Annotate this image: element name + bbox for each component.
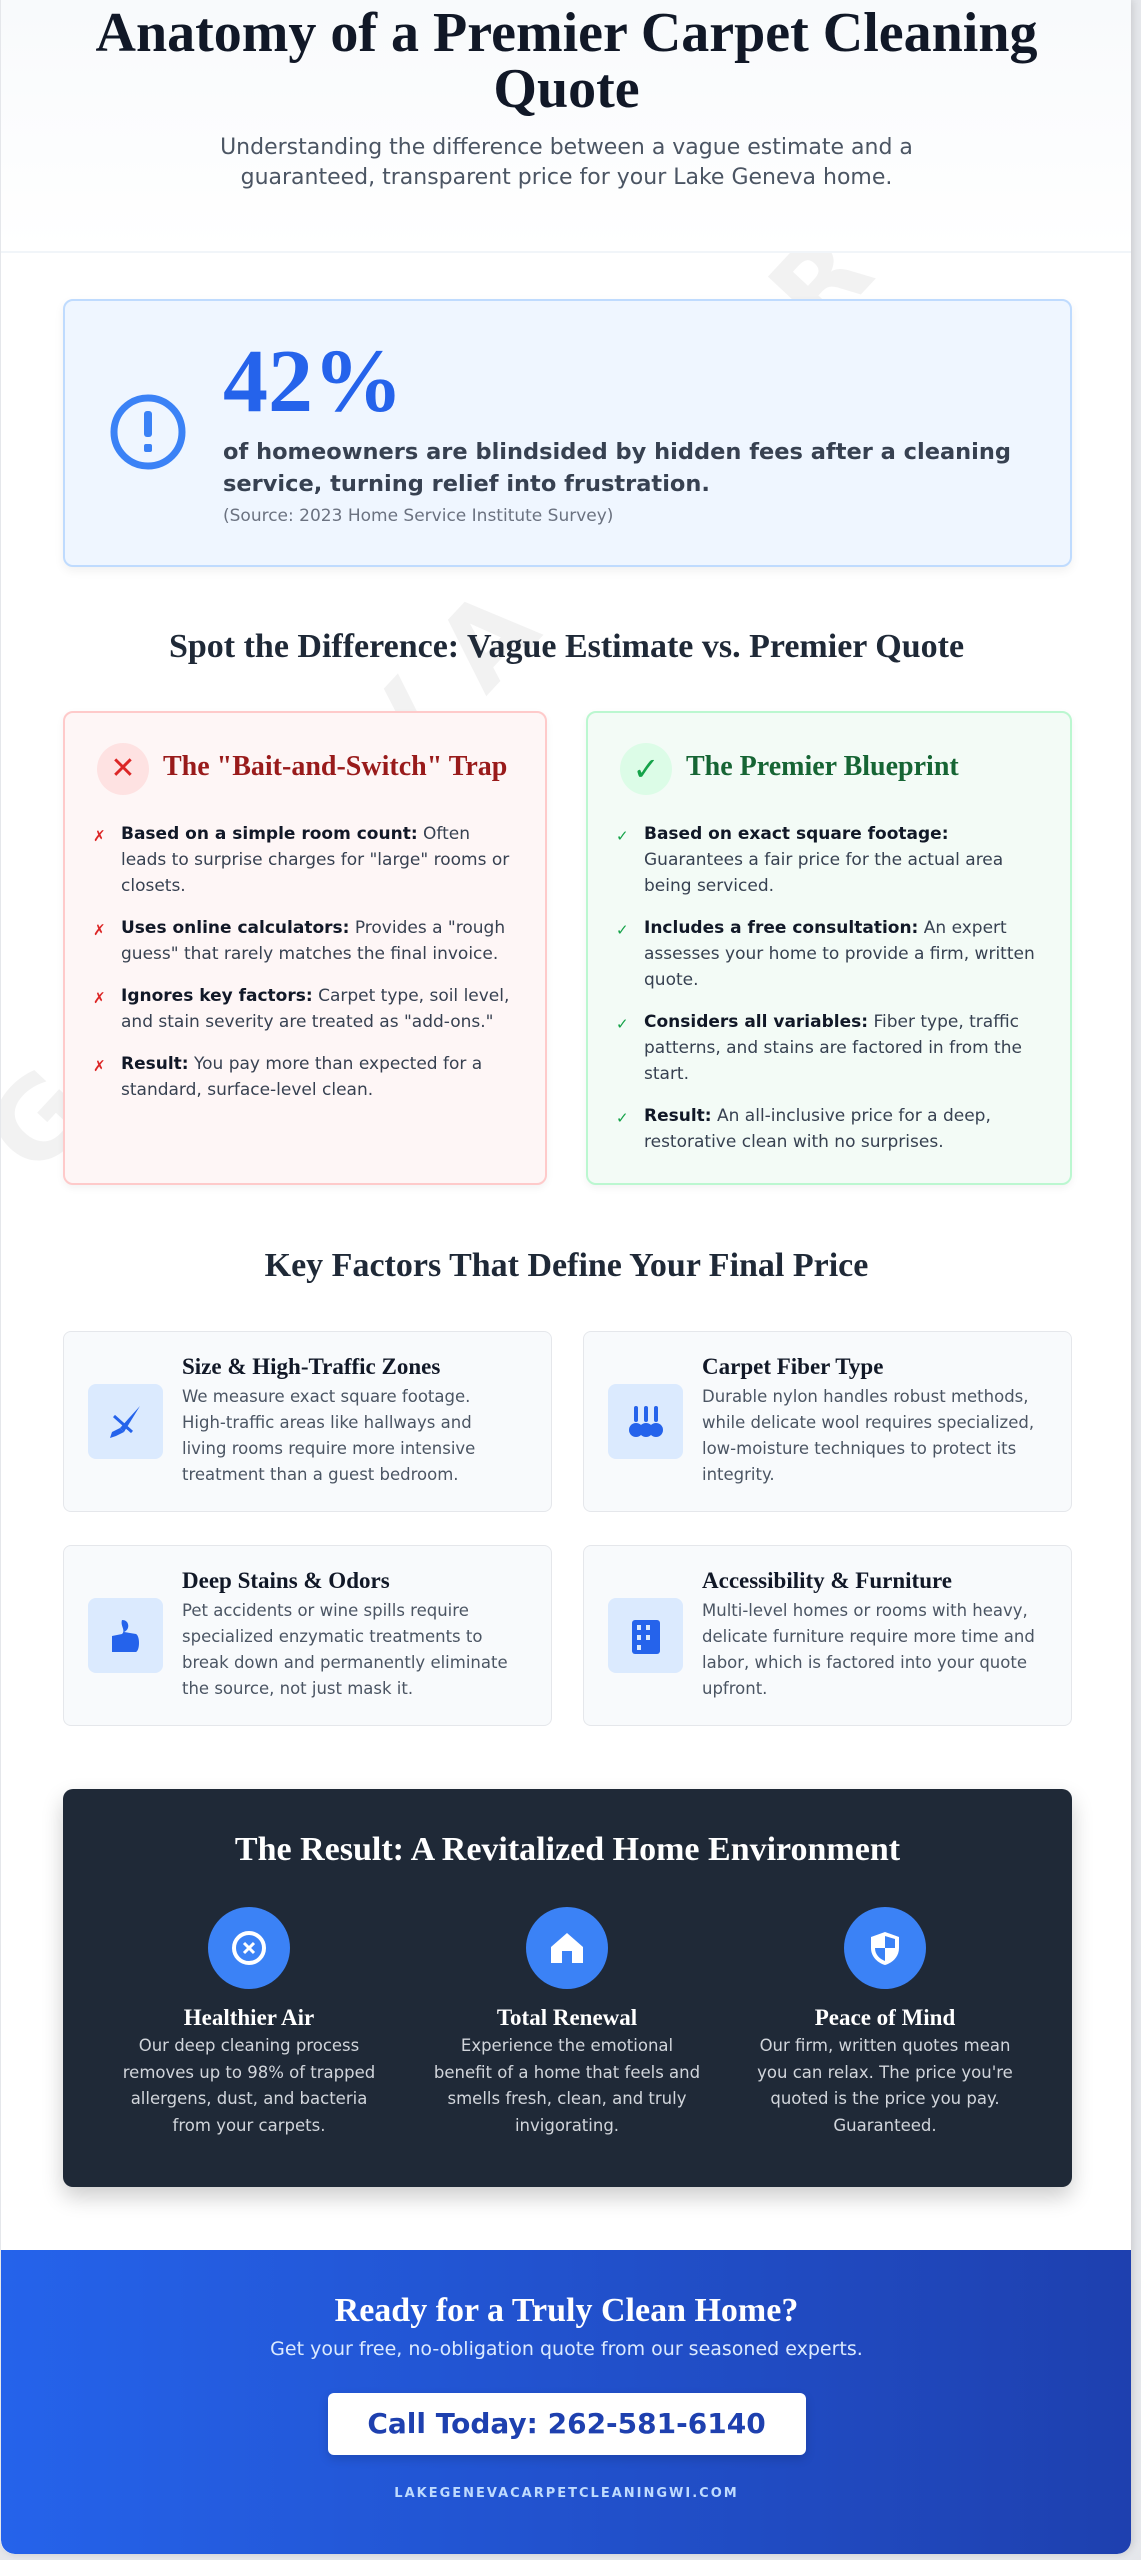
stat text: (Source: 2023 Home Service Institute Survey) [223, 506, 613, 526]
factor: fiber [583, 1331, 1072, 1512]
benefit: healthier air: Healthier Air [184, 2005, 314, 2030]
factor: size: We measure exact square footage. High-traffic areas like hallways and living rooms require more intensive treatment than a guest bedroom. [182, 1387, 475, 1484]
icon: brush [88, 1384, 163, 1459]
stat text [223, 439, 1011, 526]
icon: fibers [608, 1384, 683, 1459]
icon: exclamation [110, 394, 186, 470]
list: ✓ [616, 921, 629, 939]
list [616, 824, 1035, 1152]
list: Uses online calculators: Provides a "rough guess" that rarely matches the final invoice. [121, 918, 505, 964]
subtitle: Understanding the difference between a vague estimate and a guaranteed, transparent price for your Lake Geneva home. [220, 135, 913, 190]
factor: stains [63, 1545, 552, 1726]
list [93, 824, 510, 1100]
benefit: total renewal [434, 1907, 700, 2134]
list: Based on exact square footage: Guarantees a fair price for the actual area being serviced. [644, 824, 1003, 896]
benefit: peace of mind: Our firm, written quotes mean you can relax. The price you're quoted is the price you pay. Guaranteed. [757, 2036, 1013, 2134]
stat box [63, 299, 1072, 567]
icon: building [608, 1598, 683, 1673]
call button: Call Today: 262-581-6140 [367, 2407, 766, 2440]
header [1, 0, 1132, 253]
icon: x [97, 743, 149, 795]
heading: The Premier Blueprint [686, 751, 959, 782]
list: ✗ [93, 827, 106, 845]
cta subtitle: Get your free, no-obligation quote from our seasoned experts. [270, 2338, 863, 2360]
list: ✓ [616, 1109, 629, 1127]
factor: stains: Pet accidents or wine spills require specialized enzymatic treatments to break down and permanently eliminate the source, not just mask it. [182, 1601, 508, 1698]
factor: fiber: Carpet Fiber Type [702, 1354, 883, 1379]
list: ✓ [616, 1015, 629, 1033]
list: Considers all variables: Fiber type, traffic patterns, and stains are factored in from the start. [644, 1012, 1022, 1084]
title: Anatomy of a Premier Carpet Cleaning Quote [96, 2, 1038, 120]
list: Based on a simple room count: Often leads to surprise charges for "large" rooms or closets. [121, 824, 509, 896]
icon: stain [88, 1598, 163, 1673]
factor: fiber: Durable nylon handles robust methods, while delicate wool requires specialized, low-moisture techniques to protect its integrity. [702, 1387, 1034, 1484]
factor: accessibility [583, 1545, 1072, 1726]
benefit: healthier air: Our deep cleaning process removes up to 98% of trapped allergens, dust, and bacteria from your carpets. [123, 2036, 375, 2134]
list: Ignores key factors: Carpet type, soil level, and stain severity are treated as "add-ons." [121, 986, 509, 1032]
benefit: total renewal: Total Renewal [497, 2005, 637, 2030]
list: Result: An all-inclusive price for a deep, restorative clean with no surprises. [644, 1106, 991, 1152]
list: ✗ [93, 1057, 106, 1075]
list: ✗ [93, 989, 106, 1007]
icon: check [620, 743, 672, 795]
call button [328, 2393, 806, 2455]
icon: check: ✓ [633, 750, 659, 788]
panel: premier blueprint [586, 711, 1072, 1185]
factor: size [63, 1331, 552, 1512]
stat number: 42% [223, 332, 403, 431]
factor: size: Size & High-Traffic Zones [182, 1354, 440, 1379]
factor: accessibility: Multi-level homes or rooms with heavy, delicate furniture require more time and labor, which is factored into your quote upfront. [702, 1601, 1035, 1698]
benefit: total renewal: Experience the emotional benefit of a home that feels and smells fresh, clean, and truly invigorating. [434, 2036, 700, 2134]
benefit: healthier air [123, 1907, 375, 2134]
stat text: of homeowners are blindsided by hidden fees after a cleaning service, turning relief into frustration. [223, 439, 1011, 497]
heading: key factors: Key Factors That Define Your Final Price [265, 1247, 868, 1284]
list: Includes a free consultation: An expert assesses your home to provide a firm, written quote. [644, 918, 1035, 990]
benefit: peace of mind: Peace of Mind [815, 2005, 955, 2030]
result title: The Result: A Revitalized Home Environment [235, 1831, 900, 1868]
list: Result: You pay more than expected for a standard, surface-level clean. [121, 1054, 482, 1100]
factor: stains: Deep Stains & Odors [182, 1568, 390, 1593]
heading: spot the difference: Spot the Difference: Vague Estimate vs. Premier Quote [169, 628, 964, 665]
panel: result [63, 1789, 1072, 2187]
list: ✓ [616, 827, 629, 845]
heading: The "Bait-and-Switch" Trap [163, 751, 507, 782]
panel: bait and switch [63, 711, 547, 1185]
list: ✗ [93, 921, 106, 939]
factor: accessibility: Accessibility & Furniture [702, 1568, 952, 1593]
CTA [1, 2250, 1132, 2554]
benefit: peace of mind [757, 1907, 1013, 2134]
cta title: Ready for a Truly Clean Home? [335, 2292, 798, 2329]
website: LAKEGENEVACARPETCLEANINGWI.COM [394, 2486, 739, 2501]
icon: x: ✕ [110, 751, 136, 786]
